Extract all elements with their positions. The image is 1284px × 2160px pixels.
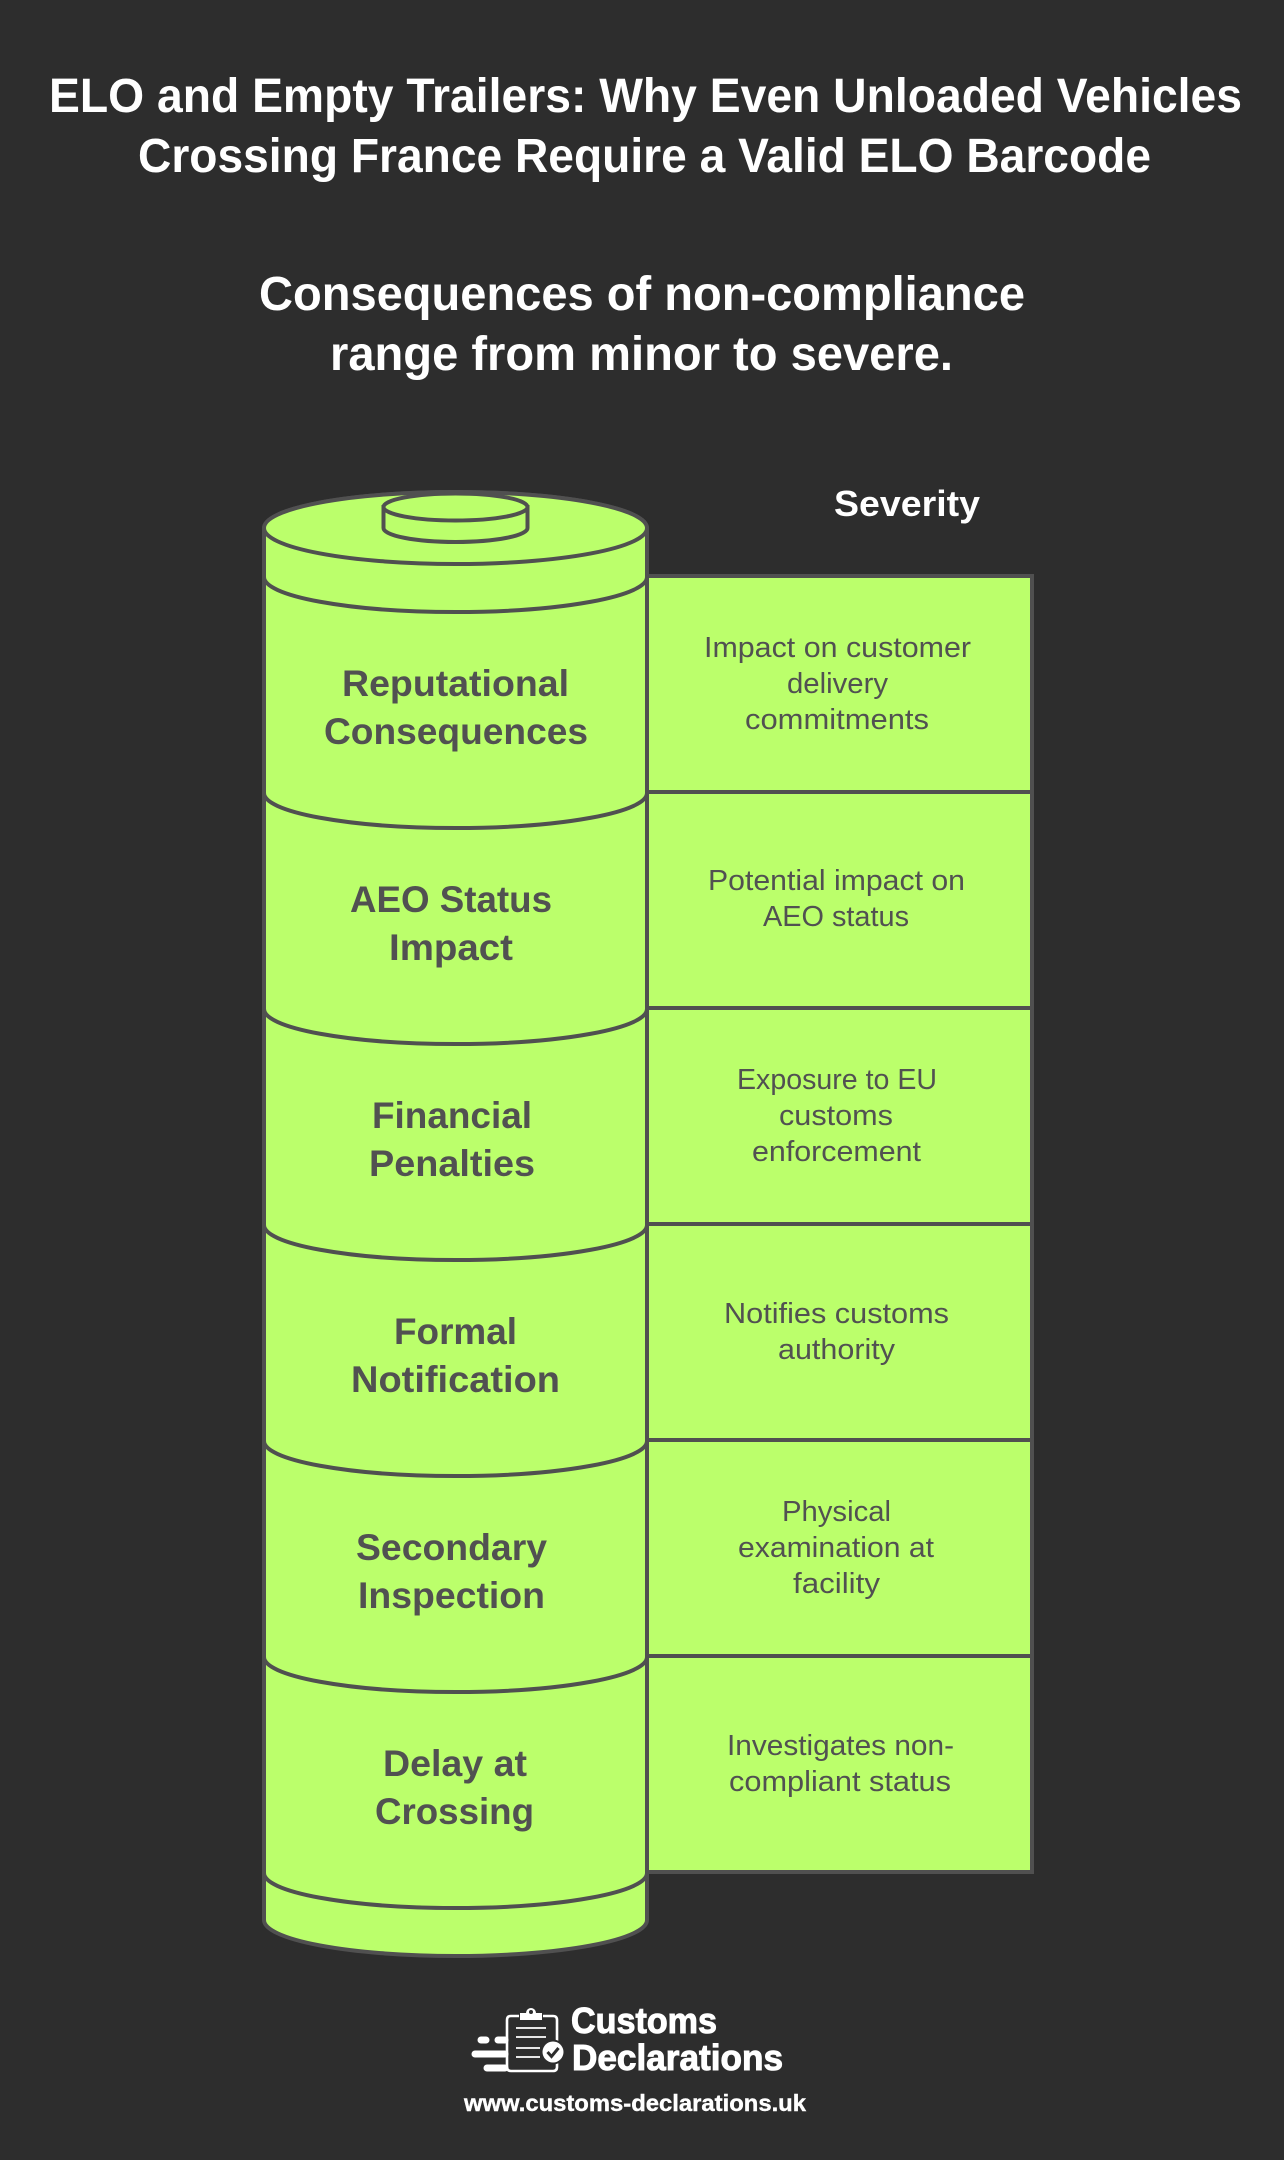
panel: investigates status: compliant status bbox=[729, 1766, 951, 1798]
subtitle bbox=[259, 268, 1025, 381]
band: Reputational Consequences bbox=[264, 662, 647, 828]
panel: notifies customs bbox=[647, 1224, 1032, 1440]
band: AEO Status Impact bbox=[264, 878, 647, 1044]
band: Financial Penalties bbox=[264, 1094, 647, 1260]
panel: AEO status impact: AEO status bbox=[763, 901, 909, 933]
panel: customer delivery impact: commitments bbox=[745, 704, 929, 736]
band: Secondary Inspection: Secondary bbox=[356, 1526, 547, 1568]
band: Secondary Inspection bbox=[264, 1526, 647, 1692]
panel: AEO status impact bbox=[647, 792, 1032, 1008]
band: Delay at Crossing bbox=[264, 1742, 647, 1908]
band: Formal Notification bbox=[264, 1310, 647, 1476]
title: Crossing France Require a Valid ELO Barcode bbox=[138, 130, 1151, 183]
band: Reputational Consequences: Reputational bbox=[342, 662, 569, 704]
panel: investigates status: Investigates non- bbox=[727, 1730, 954, 1762]
logo wordmark bbox=[571, 2000, 783, 2078]
heading: severity: Severity bbox=[834, 483, 980, 524]
band: Reputational Consequences: Consequences bbox=[324, 710, 588, 752]
band: Secondary Inspection: Inspection bbox=[358, 1574, 545, 1616]
panel: EU customs enforcement bbox=[647, 1008, 1032, 1224]
severity column bbox=[647, 576, 1032, 1872]
panel: customer delivery impact: Impact on customer bbox=[704, 632, 971, 664]
panel: AEO status impact: Potential impact on bbox=[708, 865, 965, 897]
panel: physical examination bbox=[647, 1440, 1032, 1656]
logo wordmark: Declarations bbox=[572, 2037, 783, 2078]
panel: physical examination: Physical bbox=[782, 1496, 891, 1528]
band: Delay at Crossing: Crossing bbox=[375, 1790, 534, 1832]
panel: customer delivery impact bbox=[647, 576, 1032, 792]
panel: investigates status bbox=[647, 1656, 1032, 1872]
title: ELO and Empty Trailers: Why Even Unloaded Vehicles bbox=[49, 70, 1242, 123]
panel: EU customs enforcement: customs bbox=[779, 1100, 893, 1132]
panel: physical examination: examination at bbox=[738, 1532, 934, 1564]
band: Formal Notification: Notification bbox=[351, 1358, 560, 1400]
icon: clipboard with check bbox=[475, 2008, 566, 2071]
subtitle: range from minor to severe. bbox=[330, 328, 953, 381]
cylinder body bbox=[264, 492, 647, 1956]
cylinder cap bbox=[384, 494, 528, 542]
cylinder top lid bbox=[264, 492, 647, 612]
band: Financial Penalties: Financial bbox=[372, 1094, 532, 1136]
panel: notifies customs: Notifies customs bbox=[724, 1298, 949, 1330]
panel: physical examination: facility bbox=[793, 1568, 881, 1600]
panel: EU customs enforcement: Exposure to EU bbox=[737, 1064, 937, 1096]
subtitle: Consequences of non-compliance bbox=[259, 268, 1025, 321]
website url: www.customs-declarations.uk bbox=[463, 2090, 806, 2116]
band: Financial Penalties: Penalties bbox=[369, 1142, 535, 1184]
band: AEO Status Impact: AEO Status bbox=[350, 878, 552, 920]
band: Formal Notification: Formal bbox=[394, 1310, 517, 1352]
title bbox=[49, 70, 1242, 183]
logo bbox=[463, 2000, 806, 2116]
panel: customer delivery impact: delivery bbox=[787, 668, 888, 700]
band: AEO Status Impact: Impact bbox=[389, 926, 514, 968]
panel: EU customs enforcement: enforcement bbox=[752, 1136, 921, 1168]
logo wordmark: Customs bbox=[571, 2000, 717, 2041]
band: Delay at Crossing: Delay at bbox=[383, 1742, 527, 1784]
panel: notifies customs: authority bbox=[778, 1334, 896, 1366]
